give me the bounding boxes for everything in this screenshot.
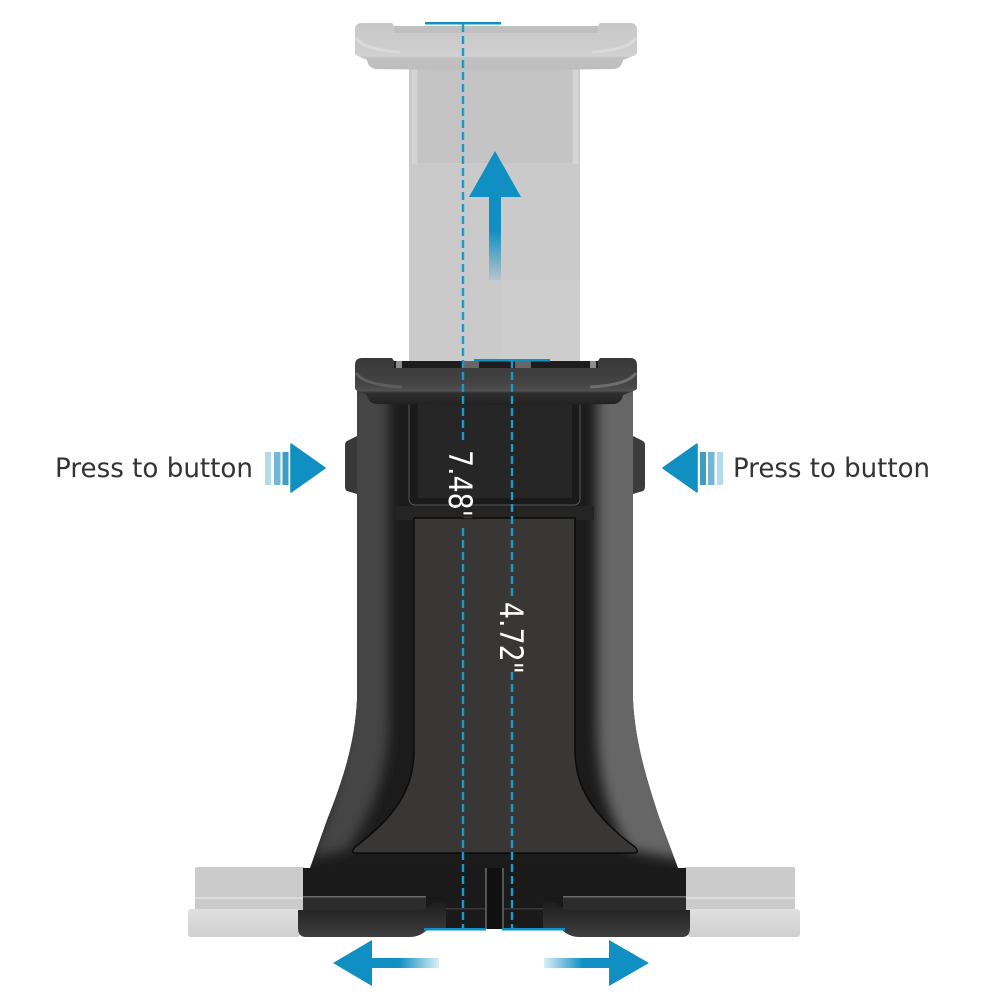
label: press to button left: Press to button <box>55 453 253 484</box>
arrow: slide right <box>544 940 649 986</box>
arrow: press right <box>265 444 325 492</box>
dimension label 4.72 inches: 4.72" <box>492 602 530 674</box>
arrow: slide left <box>333 940 439 986</box>
bottom clamp side extensions (ghosted) <box>188 867 800 937</box>
dimension label 7.48 inches: 7.48" <box>441 450 479 522</box>
blue marker at top of holder <box>474 359 550 362</box>
blue top width marker <box>425 22 501 24</box>
press side buttons <box>345 436 645 494</box>
dashed line: 7.48 inch measure <box>462 24 464 928</box>
arrow: up <box>469 151 521 280</box>
top cap <box>355 358 637 405</box>
bottom clamp base <box>298 868 690 937</box>
dashed line: 4.72 inch measure <box>511 360 513 928</box>
blue bottom width marker <box>424 928 486 930</box>
main holder body <box>310 385 685 868</box>
label: press to button right: Press to button <box>733 453 930 484</box>
arrow: press left <box>663 444 723 492</box>
blue marker right of bottom centre <box>502 928 565 930</box>
extended top clamp (ghosted) <box>355 23 637 365</box>
front panel <box>353 518 637 853</box>
